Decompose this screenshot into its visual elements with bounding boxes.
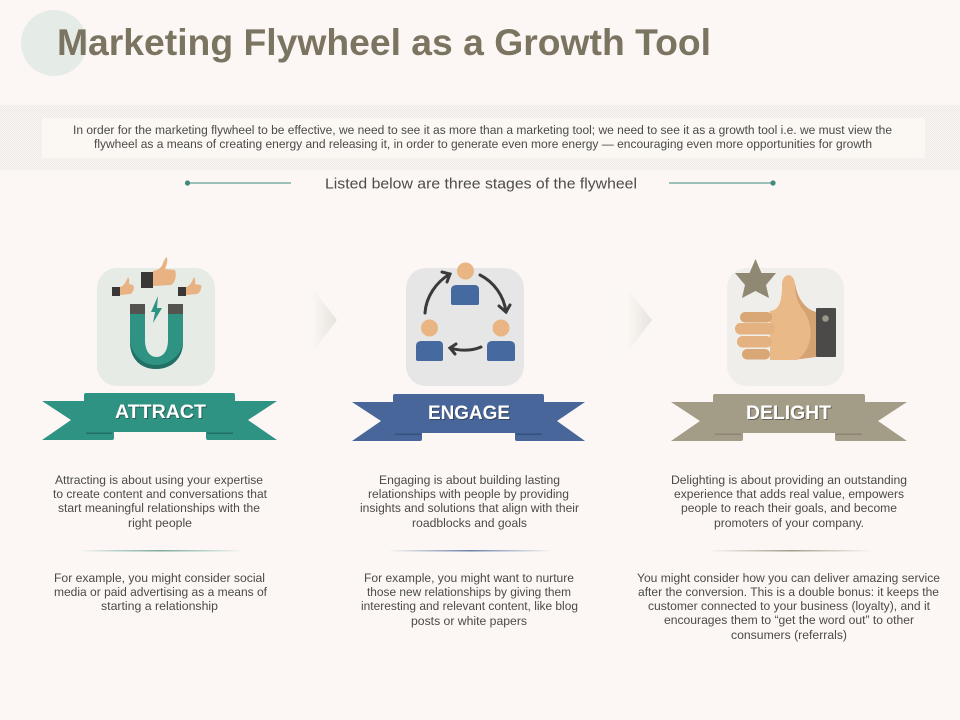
attract description: Attracting is about using your expertise — [55, 473, 263, 487]
right thumb — [178, 277, 201, 296]
icon: magnet with thumbs up — [97, 257, 215, 386]
engage description: insights and solutions that align with their — [360, 501, 579, 515]
delight example: customer connected to your business (loyalty), and it — [648, 599, 931, 613]
delight description: experience that adds real value, empowers — [674, 487, 904, 501]
left thumb — [112, 277, 134, 296]
star — [735, 259, 776, 298]
attract example: starting a relationship — [101, 599, 218, 613]
ribbon: delight: DELIGHT — [746, 403, 831, 424]
fingers — [735, 312, 775, 360]
delight example: after the conversion. This is a double bonus: it keeps the — [638, 585, 939, 599]
engage example: For example, you might want to nurture — [364, 571, 574, 585]
engage description: Engaging is about building lasting — [379, 473, 560, 487]
cuff — [816, 308, 836, 357]
engage description: relationships with people by providing — [368, 487, 569, 501]
chevron arrow 1 — [296, 268, 337, 374]
delight example: consumers (referrals) — [731, 628, 847, 642]
ribbon: attract: ATTRACT — [115, 402, 206, 423]
subheading with connector lines: Listed below are three stages of the flywheel — [325, 176, 637, 192]
ribbon: attract — [42, 393, 277, 440]
intro text: In order for the marketing flywheel to be effective, we need to see it as more than a marketing tool; we need to see it as a growth tool i.e. we must view the — [73, 123, 892, 137]
engage example: those new relationships by giving them — [367, 585, 571, 599]
decorative title circle — [21, 10, 87, 76]
delight description — [671, 473, 907, 530]
attract description: to create content and conversations that — [53, 487, 268, 501]
person left — [416, 320, 443, 361]
engage description — [360, 473, 579, 530]
engage example: posts or white papers — [411, 614, 527, 628]
magnet — [130, 304, 183, 369]
attract example: media or paid advertising as a means of — [54, 585, 268, 599]
intro text: flywheel as a means of creating energy and releasing it, in order to generate even more energy — encouraging even more opportunities for growth — [94, 137, 872, 151]
attract example: For example, you might consider social — [54, 571, 265, 585]
delight example: You might consider how you can deliver amazing service — [637, 571, 940, 585]
panel: attract — [42, 257, 277, 613]
delight description: people to reach their goals, and become — [681, 501, 897, 515]
cycle arrows — [425, 272, 510, 354]
delight description: promoters of your company. — [714, 516, 864, 530]
icon: people cycle — [406, 262, 524, 386]
ribbon: delight — [671, 394, 907, 441]
lightning bolt — [151, 296, 162, 323]
engage description: roadblocks and goals — [412, 516, 527, 530]
hand — [735, 275, 816, 360]
icon: star and thumbs up — [727, 259, 844, 386]
engage example — [361, 571, 578, 628]
intro text — [73, 123, 892, 151]
chevron arrow 2 — [611, 268, 652, 374]
attract example — [54, 571, 268, 613]
ribbon: engage — [352, 394, 585, 441]
panel: engage — [352, 262, 585, 628]
subheading with connector lines — [185, 176, 776, 192]
engage example: interesting and relevant content, like blog — [361, 599, 578, 613]
intro panel — [0, 105, 960, 170]
big thumb — [141, 257, 176, 288]
delight example — [637, 571, 940, 642]
ribbon: engage: ENGAGE — [428, 403, 510, 424]
person top — [451, 262, 479, 305]
person right — [487, 320, 515, 361]
attract description: start meaningful relationships with the — [58, 501, 260, 515]
delight example: encourages them to “get the word out” to other — [664, 613, 914, 627]
title: Marketing Flywheel as a Growth Tool — [57, 22, 711, 63]
delight description: Delighting is about providing an outstanding — [671, 473, 907, 487]
attract description — [53, 473, 268, 530]
panel: delight — [637, 259, 940, 642]
attract description: right people — [128, 516, 192, 530]
